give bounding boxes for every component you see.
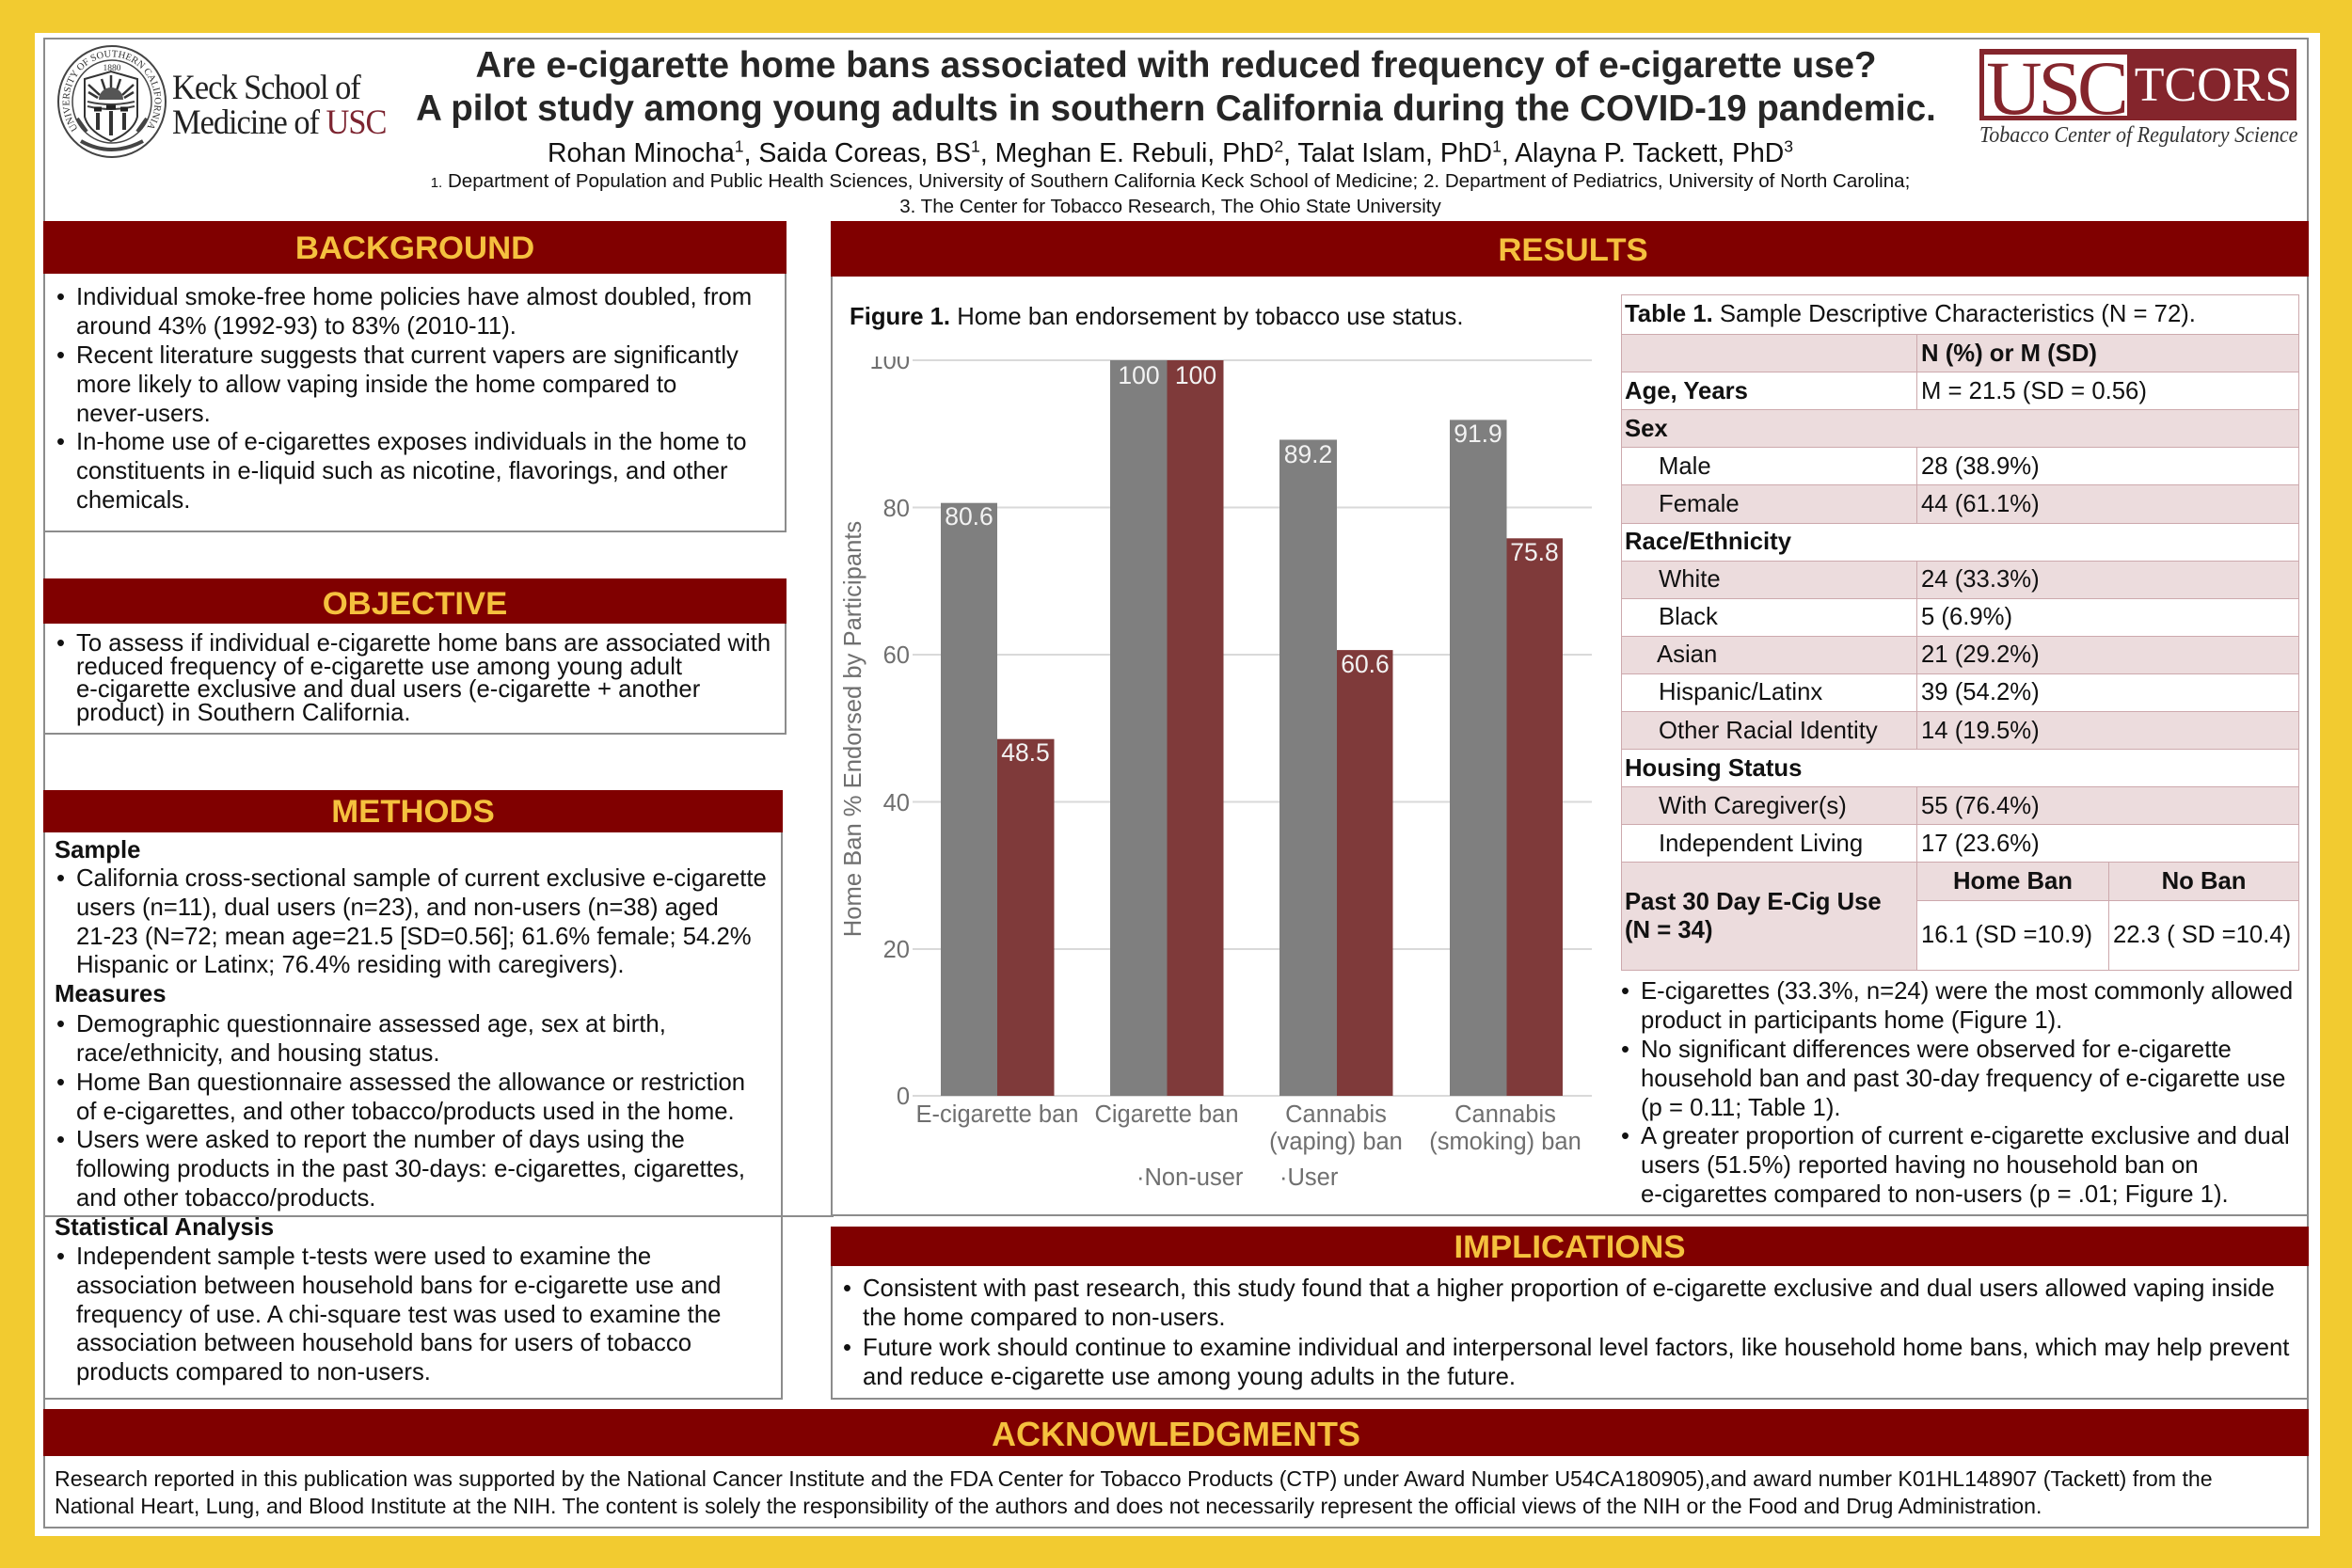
- panel: implications: [831, 1227, 2309, 1400]
- text: home ban questionnaire: of e-cigarettes, and other tobacco/products used in the home.: [76, 1099, 735, 1125]
- panel: methods: •: [56, 1069, 65, 1096]
- text: literature: Recent literature suggests that current vapers are significantly: [76, 342, 739, 369]
- heading: methods: [43, 790, 783, 832]
- panel: background: •: [56, 342, 65, 369]
- text: most commonly allowed: product in participants home (Figure 1).: [1641, 1007, 2062, 1034]
- bars: e-cigarette ban: [941, 502, 1054, 1096]
- bars: e-cigarette ban: 80.6: [945, 502, 993, 531]
- text: statistical analysis: products compared to non-users.: [76, 1359, 431, 1386]
- table 1: Female: [1659, 491, 1740, 517]
- text: no significant differences: household ban and past 30-day frequency of e-cigarette use: [1641, 1066, 2285, 1092]
- legend: [1136, 1164, 1339, 1191]
- icon: USC seal: [57, 45, 167, 158]
- category labels: [916, 1101, 1581, 1155]
- panel: objective: •: [56, 630, 65, 657]
- text: in-home use: [56, 429, 747, 514]
- panel: methods: •: [56, 1011, 65, 1037]
- text: days used: Users were asked to report the number of days using the: [76, 1127, 685, 1153]
- table 1: 17 (23.6%): [1921, 831, 2040, 857]
- heading: results: [831, 221, 2309, 277]
- text: smoke-free policies: around 43% (1992-93) to 83% (2010-11).: [76, 313, 516, 340]
- legend: ·User: [1279, 1164, 1339, 1191]
- heading: objective: OBJECTIVE: [323, 586, 507, 622]
- text: funding: Research reported in this publication was supported by the National Cancer Institute and the FDA Center for Tobacco Products (CTP) under Award Number U54CA180905),and award number K01HL148907 (Tackett) from the: [55, 1466, 2213, 1491]
- text: in-home use: In-home use of e-cigarettes exposes individuals in the home to: [76, 429, 747, 455]
- table 1: Home Ban: [1953, 868, 2073, 895]
- subheading: measures: Measures: [55, 981, 167, 1007]
- logo: USC TCORS: [1979, 49, 2297, 148]
- text: funding: [55, 1466, 2213, 1518]
- logo tagline: Tobacco Center of Regulatory Science: [1979, 122, 2297, 148]
- text: smoke-free policies: [56, 284, 752, 340]
- text: demographics: [56, 1011, 666, 1067]
- table 1: Housing Status: [1625, 755, 1802, 782]
- panel: acknowledgments: [43, 1409, 2309, 1528]
- table 1: Other Racial Identity: [1659, 718, 1878, 744]
- bars: cannabis vaping ban: 60.6: [1341, 650, 1390, 678]
- text: greater proportion: users (51.5%) reported having no household ban on: [1641, 1152, 2199, 1179]
- text: most commonly allowed: [1621, 978, 2293, 1034]
- text: consistent with past research: [843, 1275, 2275, 1331]
- text: days used: and other tobacco/products.: [76, 1185, 375, 1212]
- text: greater proportion: [1621, 1123, 2290, 1208]
- table 1: With Caregiver(s): [1659, 793, 1847, 819]
- heading: background: [43, 221, 787, 274]
- text: sample: users (n=11), dual users (n=23), and non-users (n=38) aged: [76, 895, 719, 921]
- panel: implications: •: [843, 1335, 851, 1361]
- category labels: (vaping) ban: [1269, 1129, 1403, 1155]
- authors: Rohan Minocha1, Saida Coreas, BS1, Meghan E. Rebuli, PhD2, Talat Islam, PhD1, Alayna P. Tackett, PhD3: [548, 137, 1793, 168]
- bars: cannabis smoking ban: 75.8: [1510, 538, 1559, 566]
- category labels: Cannabis: [1285, 1101, 1387, 1128]
- affiliations: 3. The Center for Tobacco Research, The Ohio State University: [899, 196, 1441, 217]
- category labels: Cigarette ban: [1094, 1101, 1239, 1128]
- panel: results: [831, 221, 2309, 1216]
- text: days used: following products in the past 30-days: e-cigarettes, cigarettes,: [76, 1156, 745, 1182]
- text: future work: [843, 1335, 2290, 1390]
- heading: methods: METHODS: [331, 794, 495, 830]
- y axis labels: 40: [883, 790, 910, 816]
- panel: results: •: [1621, 1037, 1629, 1063]
- logo wordmark: Medicine of USC: [172, 103, 386, 141]
- text: sample: [56, 865, 767, 978]
- table 1: N (%) or M (SD): [1921, 341, 2097, 367]
- bars: cigarette ban: 100: [1118, 361, 1160, 389]
- text: no significant differences: [1621, 1037, 2285, 1121]
- panel: methods: •: [56, 865, 65, 892]
- bar chart: [840, 348, 1592, 1191]
- text: objective: [56, 630, 771, 726]
- subheading: sample: Sample: [55, 837, 140, 863]
- category labels: Cannabis: [1454, 1101, 1556, 1128]
- table 1: M = 21.5 (SD = 0.56): [1921, 378, 2147, 404]
- category labels: E-cigarette ban: [916, 1101, 1078, 1128]
- text: no significant differences: (p = 0.11; Table 1).: [1641, 1095, 1841, 1121]
- y axis labels: 80: [883, 496, 910, 522]
- heading: results: RESULTS: [1498, 232, 1648, 268]
- text: statistical analysis: [56, 1243, 721, 1386]
- icon: USC seal: 1880: [103, 64, 121, 73]
- panel: background: [43, 221, 787, 532]
- heading: objective: [43, 578, 787, 624]
- text: days used: [56, 1127, 745, 1212]
- table 1: 55 (76.4%): [1921, 793, 2040, 819]
- text: demographics: race/ethnicity, and housing status.: [76, 1040, 440, 1067]
- y axis labels: 60: [883, 642, 910, 669]
- table 1: Independent Living: [1659, 831, 1863, 857]
- table 1: 28 (38.9%): [1921, 453, 2040, 480]
- table 1: Past 30 Day E-Cig Use: [1625, 889, 1882, 915]
- text: statistical analysis: frequency of use. A chi-square test was used to examine the: [76, 1302, 721, 1328]
- title: A pilot study among young adults in southern California during the COVID-19 pandemic.: [416, 88, 1936, 129]
- logo wordmark: [172, 69, 386, 141]
- text: in-home use: chemicals.: [76, 487, 190, 514]
- table 1: 5 (6.9%): [1921, 604, 2012, 630]
- bars: cigarette ban: [1110, 360, 1223, 1096]
- panel: implications: •: [843, 1275, 851, 1302]
- text: sample: Hispanic or Latinx; 76.4% residing with caregivers).: [76, 952, 625, 978]
- text: statistical analysis: association between household bans for e-cigarette use and: [76, 1273, 721, 1299]
- y axis title: Home Ban % Endorsed by Participants: [840, 521, 866, 937]
- table 1: White: [1659, 566, 1721, 593]
- bars: cannabis smoking ban: [1450, 420, 1563, 1096]
- text: consistent with past research: the home compared to non-users.: [863, 1305, 1226, 1331]
- logo red box: [1979, 49, 2296, 120]
- title: Are e-cigarette home bans associated with reduced frequency of e-cigarette use?: [475, 45, 1877, 86]
- bars: cigarette ban: 100: [1175, 361, 1216, 389]
- table 1: Sex: [1625, 416, 1668, 442]
- logo: Keck School of Medicine of USC: [57, 45, 386, 158]
- bars: cannabis vaping ban: 89.2: [1284, 440, 1332, 468]
- text: objective: e-cigarette exclusive and dual users (e-cigarette + another: [76, 676, 700, 703]
- category labels: (smoking) ban: [1429, 1129, 1581, 1155]
- panel: results: •: [1621, 1123, 1629, 1149]
- text: literature: never-users.: [76, 401, 211, 427]
- text: most commonly allowed: E-cigarettes (33.3%, n=24) were the most commonly allowed: [1641, 978, 2293, 1005]
- table 1: 14 (19.5%): [1921, 718, 2040, 744]
- panel: results: •: [1621, 978, 1629, 1005]
- table 1: (N = 34): [1625, 917, 1713, 943]
- text: statistical analysis: association between household bans for users of tobacco: [76, 1330, 691, 1356]
- table 1: Table 1. Sample Descriptive Characteristics (N = 72).: [1625, 301, 2196, 327]
- panel: methods: •: [56, 1243, 65, 1270]
- text: no significant differences: No significant differences were observed for e-cigarette: [1641, 1037, 2232, 1063]
- panel: methods: [43, 790, 783, 1400]
- table 1: Race/Ethnicity: [1625, 529, 1791, 555]
- table 1: Male: [1659, 453, 1711, 480]
- text: literature: [56, 342, 739, 427]
- text: home ban questionnaire: Home Ban questionnaire assessed the allowance or restriction: [76, 1069, 745, 1096]
- text: sample: California cross-sectional sample of current exclusive e-cigarette: [76, 865, 767, 892]
- heading: acknowledgments: [43, 1409, 2309, 1456]
- panel: objective: [43, 578, 787, 735]
- text: objective: To assess if individual e-cigarette home bans are associated with: [76, 630, 771, 657]
- legend: ·Non-user: [1136, 1164, 1244, 1191]
- panel: background: •: [56, 429, 65, 455]
- text: home ban questionnaire: [56, 1069, 745, 1125]
- text: objective: product) in Southern California.: [76, 700, 411, 726]
- text: greater proportion: e-cigarettes compared to non-users (p = .01; Figure 1).: [1641, 1181, 2229, 1208]
- text: statistical analysis: Independent sample t-tests were used to examine the: [76, 1243, 651, 1270]
- subheading: statistical analysis: Statistical Analysis: [55, 1214, 274, 1241]
- affiliations: [431, 170, 1910, 217]
- heading: implications: [831, 1227, 2309, 1266]
- text: funding: National Heart, Lung, and Blood Institute at the NIH. The content is solely the responsibility of the authors and does not necessarily represent the official views of the NIH or the Food and Drug Administration.: [55, 1494, 2042, 1518]
- panel: methods: •: [56, 1127, 65, 1153]
- table 1: 24 (33.3%): [1921, 566, 2040, 593]
- bars: cannabis smoking ban: 91.9: [1454, 420, 1502, 448]
- title: [416, 45, 1936, 129]
- text: demographics: Demographic questionnaire assessed age, sex at birth,: [76, 1011, 666, 1037]
- logo TCORS: TCORS: [2135, 58, 2292, 112]
- table 1: Hispanic/Latinx: [1659, 679, 1822, 705]
- table 1: Age, Years: [1625, 378, 1748, 404]
- text: objective: reduced frequency of e-cigarette use among young adult: [76, 654, 682, 680]
- y axis labels: 0: [897, 1084, 910, 1110]
- logo wordmark: Keck School of: [172, 69, 360, 107]
- text: smoke-free policies: Individual smoke-free home policies have almost doubled, from: [76, 284, 752, 310]
- y axis labels: 20: [883, 937, 910, 963]
- table 1: Asian: [1657, 641, 1717, 668]
- table 1: No Ban: [2162, 868, 2246, 895]
- table 1: 22.3 ( SD =10.4): [2113, 922, 2291, 948]
- icon: USC seal: UNIVERSITY OF SOUTHERN CALIFORNIA: [62, 50, 162, 133]
- table 1: 21 (29.2%): [1921, 641, 2040, 668]
- text: in-home use: constituents in e-liquid such as nicotine, flavorings, and other: [76, 458, 728, 484]
- table 1: [1621, 294, 2299, 971]
- text: future work: and reduce e-cigarette use among young adults in the future.: [863, 1364, 1516, 1390]
- text: greater proportion: A greater proportion of current e-cigarette exclusive and dual: [1641, 1123, 2290, 1149]
- bars: cannabis vaping ban: [1279, 440, 1392, 1096]
- y axis labels: 100: [869, 348, 910, 374]
- table 1: Black: [1659, 604, 1718, 630]
- figure caption: Figure 1. Home ban endorsement by tobacco use status.: [850, 304, 1464, 330]
- heading: acknowledgments: ACKNOWLEDGMENTS: [992, 1415, 1360, 1453]
- bars: e-cigarette ban: 48.5: [1001, 738, 1050, 767]
- table 1: 16.1 (SD =10.9): [1921, 922, 2092, 948]
- heading: background: BACKGROUND: [295, 230, 534, 266]
- table 1: 44 (61.1%): [1921, 491, 2040, 517]
- y axis labels: [869, 348, 910, 1110]
- text: future work: Future work should continue to examine individual and interpersonal level factors, like household home bans, which may help prevent: [863, 1335, 2289, 1361]
- text: literature: more likely to allow vaping inside the home compared to: [76, 372, 676, 398]
- text: sample: 21-23 (N=72; mean age=21.5 [SD=0.56]; 61.6% female; 54.2%: [76, 924, 752, 950]
- text: consistent with past research: Consistent with past research, this study found that a higher proportion of e-cigarette exclusive and dual users allowed vaping inside: [863, 1275, 2275, 1302]
- panel: background: •: [56, 284, 65, 310]
- affiliations: 1. Department of Population and Public Health Sciences, University of Southern California Keck School of Medicine; 2. Department of Pediatrics, University of North Carolina;: [431, 170, 1910, 192]
- table 1: 39 (54.2%): [1921, 679, 2040, 705]
- heading: implications: IMPLICATIONS: [1454, 1229, 1686, 1265]
